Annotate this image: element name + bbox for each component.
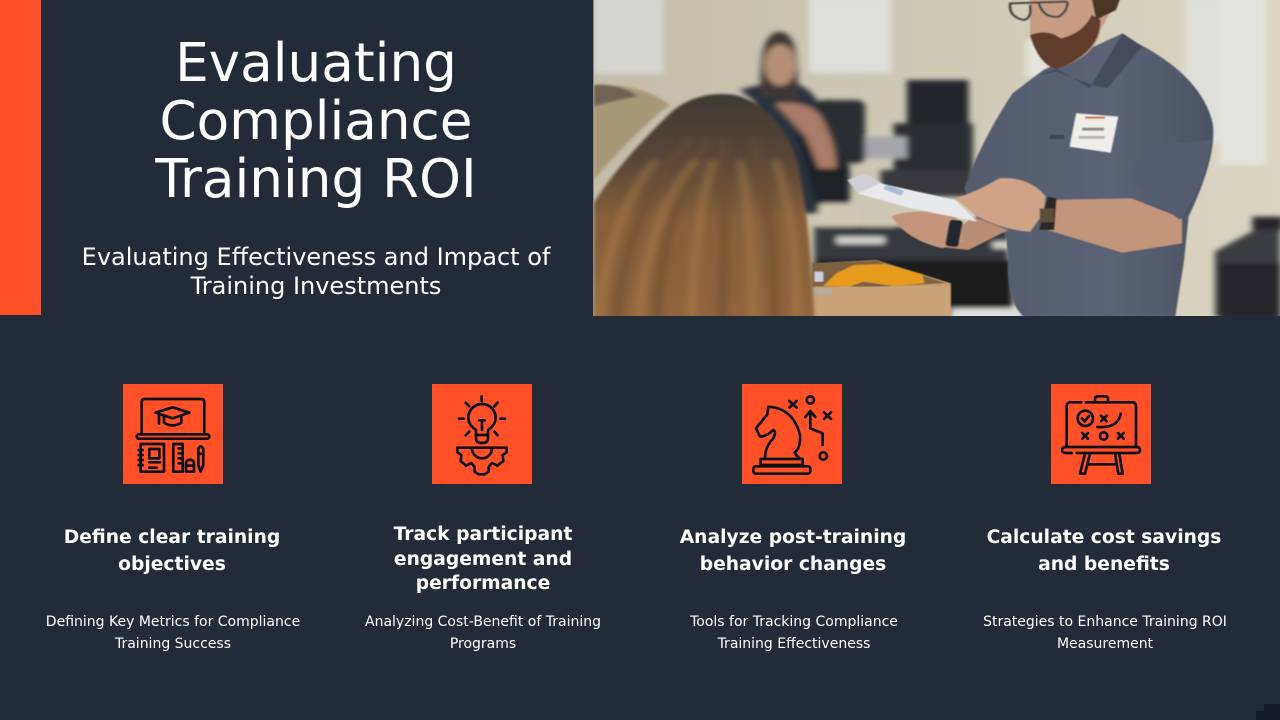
- heading: [680, 527, 906, 575]
- background scene: [594, 0, 1280, 320]
- heading: engagement and: [394, 548, 572, 570]
- photo divider: [593, 0, 594, 316]
- description: [46, 614, 300, 652]
- title: Compliance: [159, 90, 473, 152]
- title: Training ROI: [155, 148, 477, 210]
- near hand: [955, 178, 1046, 232]
- description: Training Effectiveness: [718, 636, 870, 652]
- heading: Analyze post-training: [680, 527, 906, 548]
- heading: behavior changes: [700, 554, 886, 575]
- title: [155, 32, 477, 210]
- heading: objectives: [118, 554, 226, 575]
- heading: Calculate cost savings: [987, 527, 1221, 548]
- heading: [394, 524, 572, 594]
- wall: [590, 0, 1280, 317]
- description: [365, 614, 601, 652]
- description: Strategies to Enhance Training ROI: [983, 614, 1227, 630]
- heading: performance: [416, 573, 550, 594]
- heading: [64, 527, 280, 575]
- feature column 2: [365, 384, 601, 652]
- accent bar: [0, 0, 41, 315]
- heading: Track participant: [394, 524, 572, 545]
- description: Programs: [450, 636, 516, 652]
- photo: trainer with documents in an office: [594, 0, 1280, 316]
- far forearm: [938, 217, 1008, 250]
- description: [983, 614, 1227, 652]
- title: Evaluating: [175, 32, 457, 94]
- feature column 1: [46, 384, 300, 652]
- subtitle: Training Investments: [191, 272, 441, 300]
- description: Defining Key Metrics for Compliance: [46, 614, 300, 630]
- description: Training Success: [115, 636, 231, 652]
- subtitle: Evaluating Effectiveness and Impact of: [82, 243, 550, 271]
- box of supplies: [801, 260, 951, 317]
- feature column 3: [680, 384, 906, 652]
- description: [690, 614, 898, 652]
- corner artifact: [1256, 704, 1280, 720]
- description: Analyzing Cost-Benefit of Training: [365, 614, 601, 630]
- description: Tools for Tracking Compliance: [690, 614, 898, 630]
- description: Measurement: [1057, 636, 1153, 652]
- blonde listener: [594, 85, 669, 180]
- heading: and benefits: [1038, 554, 1170, 575]
- feature column 4: [983, 384, 1227, 652]
- man: [847, 0, 1213, 317]
- heading: Define clear training: [64, 527, 280, 548]
- heading: [987, 527, 1221, 575]
- subtitle: [82, 243, 551, 300]
- foreground listener hair: [594, 94, 814, 320]
- near forearm: [1048, 198, 1182, 253]
